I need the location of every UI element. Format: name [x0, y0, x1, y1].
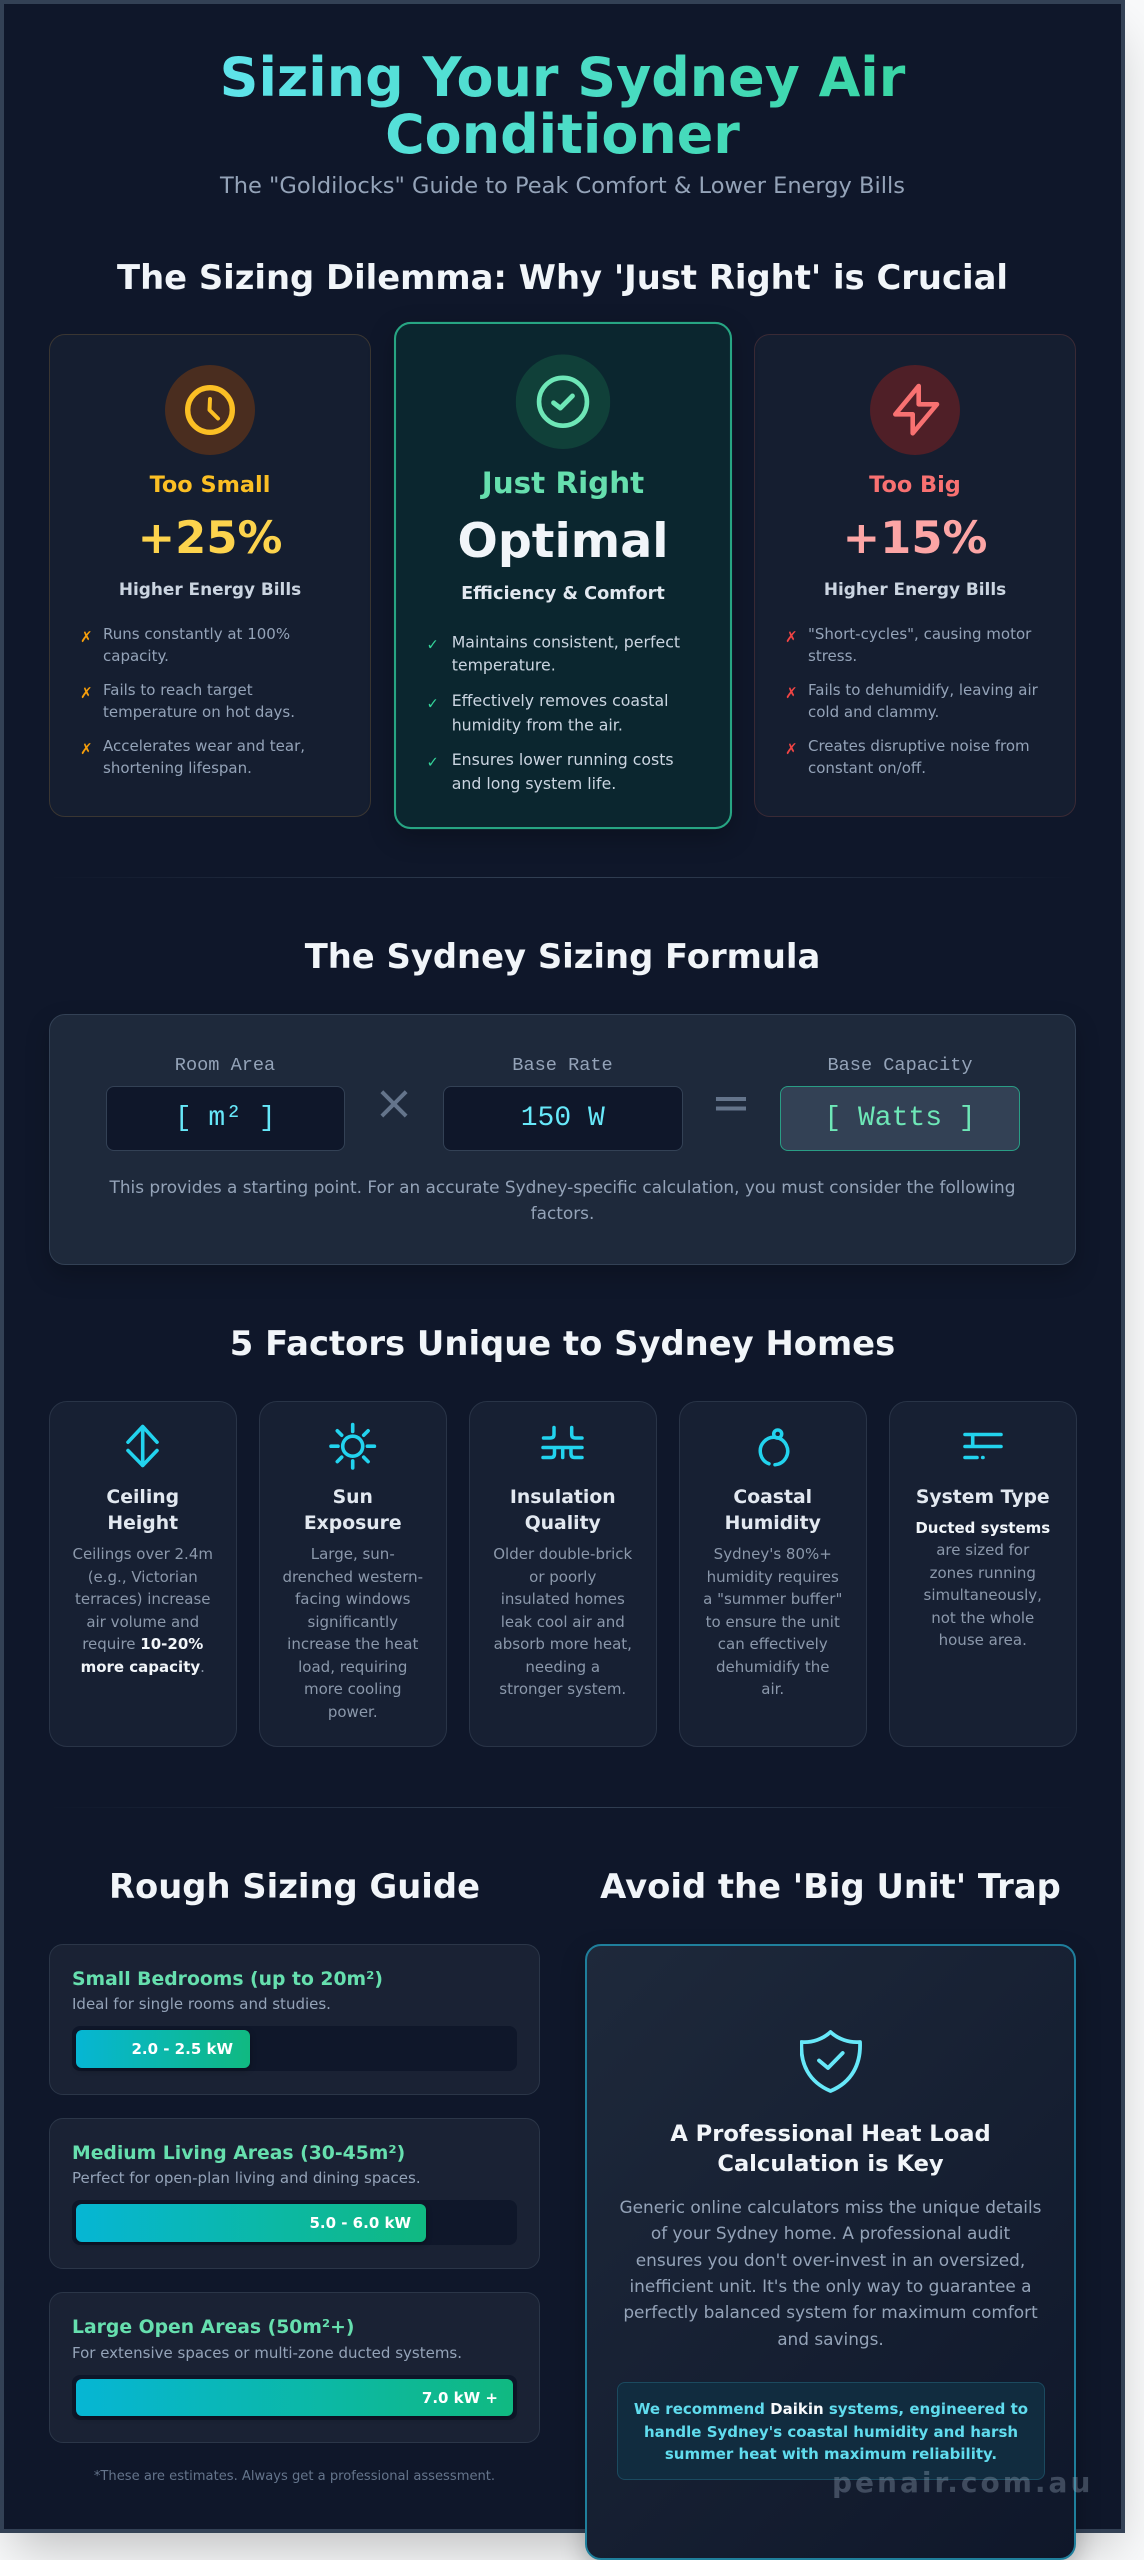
factor text: absorb more heat, — [494, 1635, 632, 1653]
factor text — [493, 1545, 632, 1698]
factor title: Quality — [525, 1513, 601, 1534]
list of drawbacks: ✗ — [80, 628, 93, 646]
list of benefits: and long system life. — [452, 774, 616, 793]
factor text: Older double-brick — [493, 1545, 632, 1563]
operator: equals: = — [711, 1075, 751, 1131]
list of benefits: humidity from the air. — [452, 715, 623, 734]
factor text: a "summer buffer" — [703, 1590, 842, 1608]
icon: system sliders — [963, 1432, 1003, 1460]
list of benefits: temperature. — [452, 656, 556, 675]
factor title — [106, 1486, 179, 1534]
factor text — [915, 1518, 1050, 1649]
list of drawbacks: capacity. — [103, 647, 169, 665]
card paragraph: ensures you don't over-invest in an oversized, — [636, 2250, 1025, 2270]
panel: insulation quality — [469, 1400, 656, 1747]
factor text: (e.g., Victorian — [88, 1568, 198, 1586]
callout: daikin recommendation: We recommend Daikin systems, engineered to — [634, 2400, 1028, 2418]
panel: coastal humidity — [679, 1400, 866, 1747]
label: room area: Room Area — [175, 1055, 275, 1076]
callout: daikin recommendation: summer heat with maximum reliability. — [665, 2445, 997, 2463]
factor text: house area. — [939, 1631, 1027, 1649]
factor text: more cooling — [304, 1680, 402, 1698]
list of drawbacks: ✗ — [80, 684, 93, 702]
list of benefits: ✓ — [426, 636, 439, 653]
input: m2: [ m² ] — [175, 1103, 276, 1134]
list of drawbacks: stress. — [808, 647, 857, 665]
heading: formula: The Sydney Sizing Formula — [305, 937, 820, 976]
card paragraph: Generic online calculators miss the unique details — [620, 2197, 1041, 2217]
factor title: System Type — [916, 1486, 1050, 1508]
icon: ceiling arrows — [126, 1424, 159, 1468]
panel: medium living areas — [49, 2118, 540, 2269]
item title: Large Open Areas (50m²+) — [72, 2317, 354, 2338]
input: 150 W: 150 W — [521, 1103, 605, 1134]
factor title: Coastal — [733, 1486, 812, 1508]
result: watts — [780, 1086, 1020, 1151]
label: base capacity: Base Capacity — [827, 1055, 973, 1076]
factor title — [304, 1486, 402, 1534]
factor text: or poorly — [529, 1568, 596, 1586]
factor text: Ceilings over 2.4m — [72, 1545, 213, 1563]
heading: sizing dilemma: The Sizing Dilemma: Why 'Just Right' is Crucial — [117, 258, 1008, 297]
list of benefits: Ensures lower running costs — [452, 751, 674, 769]
factor text: more capacity. — [81, 1658, 205, 1676]
divider — [49, 877, 1076, 878]
factor text: facing windows — [295, 1590, 410, 1608]
label: too big: Too Big — [869, 472, 961, 498]
panel: sun exposure — [259, 1400, 446, 1747]
subtitle: The "Goldilocks" Guide to Peak Comfort & Lower Energy Bills — [220, 172, 905, 198]
input: m2 — [106, 1086, 345, 1151]
list of drawbacks: shortening lifespan. — [103, 759, 252, 777]
list of drawbacks: ✗ — [785, 628, 798, 646]
bar: 5.0 - 6.0 kW — [72, 2200, 517, 2245]
card paragraph: and savings. — [777, 2329, 884, 2349]
list of drawbacks — [785, 624, 1038, 777]
list of drawbacks: "Short-cycles", causing motor — [808, 624, 1031, 642]
list of drawbacks: Accelerates wear and tear, — [103, 737, 305, 755]
list of drawbacks: Runs constantly at 100% — [103, 624, 290, 642]
factor text: not the whole — [931, 1608, 1034, 1626]
bar: 5.0 - 6.0 kW: 5.0 - 6.0 kW — [309, 2214, 411, 2232]
factor text: insulated homes — [501, 1590, 625, 1608]
heading: rough sizing guide: Rough Sizing Guide — [109, 1867, 480, 1906]
divider — [49, 1806, 1076, 1808]
list of drawbacks — [80, 624, 305, 777]
factor text: increase the heat — [287, 1635, 418, 1653]
factor text: significantly — [308, 1612, 398, 1630]
factor title — [725, 1486, 821, 1534]
stat caption: Higher Energy Bills — [119, 579, 301, 599]
factor text: simultaneously, — [924, 1586, 1042, 1604]
factor text: Large, sun- — [311, 1545, 395, 1563]
factor text: leak cool air and — [501, 1612, 625, 1630]
factor text: to ensure the unit — [706, 1612, 840, 1630]
label: just right: Just Right — [482, 466, 644, 501]
list of drawbacks: Fails to dehumidify, leaving air — [808, 681, 1038, 699]
title: Conditioner — [385, 102, 740, 166]
stat caption: Efficiency & Comfort — [461, 582, 665, 603]
factor title: Height — [107, 1513, 178, 1534]
card heading: A Professional Heat Load — [670, 2120, 991, 2146]
heading: big unit trap: Avoid the 'Big Unit' Trap — [600, 1867, 1061, 1906]
list of benefits: ✓ — [426, 754, 439, 771]
title — [0, 48, 1125, 162]
icon: shield check — [800, 2030, 862, 2093]
panel: too big — [754, 334, 1076, 817]
factor text — [703, 1545, 842, 1698]
list of drawbacks: cold and clammy. — [808, 703, 939, 721]
factor title: Exposure — [304, 1513, 402, 1534]
factor text: stronger system. — [499, 1680, 626, 1698]
list of drawbacks: Creates disruptive noise from — [808, 737, 1030, 755]
card paragraph — [620, 2197, 1041, 2349]
factor text — [72, 1545, 213, 1676]
panel: ceiling height — [49, 1400, 236, 1747]
stat caption: Higher Energy Bills — [824, 579, 1006, 599]
list of drawbacks: temperature on hot days. — [103, 703, 295, 721]
factor title: Insulation — [510, 1486, 616, 1508]
item subtitle: Perfect for open-plan living and dining spaces. — [72, 2169, 421, 2187]
list of benefits: Effectively removes coastal — [452, 692, 669, 710]
item subtitle: For extensive spaces or multi-zone ducted systems. — [72, 2344, 462, 2362]
callout: daikin recommendation: handle Sydney's coastal humidity and harsh — [644, 2422, 1018, 2440]
list of benefits — [426, 633, 680, 793]
panel: formula — [49, 1014, 1076, 1265]
panel: small bedrooms — [49, 1944, 540, 2095]
factor text: power. — [328, 1702, 378, 1720]
panel: large open areas — [49, 2292, 540, 2443]
item title: Small Bedrooms (up to 20m²) — [72, 1969, 383, 1990]
factor title: Ceiling — [106, 1486, 179, 1508]
bar: 2.0 - 2.5 kW — [72, 2026, 517, 2071]
label: too small: Too Small — [150, 472, 270, 498]
panel: just right — [394, 322, 732, 829]
factor title — [510, 1486, 616, 1534]
item subtitle: Ideal for single rooms and studies. — [72, 1995, 331, 2013]
list of benefits: Maintains consistent, perfect — [452, 633, 680, 651]
card paragraph: perfectly balanced system for maximum comfort — [623, 2302, 1038, 2322]
list of drawbacks: constant on/off. — [808, 759, 926, 777]
factor text: zones running — [930, 1564, 1036, 1582]
bar: 2.0 - 2.5 kW: 2.0 - 2.5 kW — [131, 2040, 233, 2058]
input: 150 W — [443, 1086, 682, 1151]
factor text — [282, 1545, 423, 1720]
callout: daikin recommendation — [617, 2382, 1045, 2480]
card paragraph: of your Sydney home. A professional audit — [651, 2223, 1010, 2243]
factor text: drenched western- — [282, 1568, 423, 1586]
bar: 7.0 kW +: 7.0 kW + — [422, 2388, 498, 2406]
factor text: humidity requires — [707, 1568, 839, 1586]
icon: clock — [165, 365, 255, 455]
stat: +25%: +25% — [138, 511, 282, 564]
factor text: air. — [761, 1680, 784, 1698]
panel: too small — [49, 334, 371, 817]
watermark: penair.com.au — [832, 2466, 1093, 2499]
formula note: This provides a starting point. For an accurate Sydney-specific calculation, you must consider the following — [110, 1177, 1015, 1197]
stat: +15%: +15% — [843, 511, 987, 564]
factor text: load, requiring — [298, 1658, 407, 1676]
factor text: terraces) increase — [75, 1590, 210, 1608]
icon: check circle — [516, 354, 610, 449]
list of drawbacks: Fails to reach target — [103, 681, 253, 699]
icon: bolt — [870, 365, 960, 455]
icon: humidity ring — [758, 1428, 790, 1466]
list of benefits: ✓ — [426, 695, 439, 712]
title: Sizing Your Sydney Air — [220, 46, 905, 108]
factor text: air volume and — [86, 1612, 199, 1630]
operator: multiply: × — [374, 1075, 414, 1131]
list of drawbacks: ✗ — [785, 740, 798, 758]
panel: heat load calculation — [585, 1944, 1076, 2560]
card paragraph: inefficient unit. It's the only way to guarantee a — [629, 2276, 1032, 2296]
result: watts: [ Watts ] — [824, 1103, 976, 1134]
factor title: Sun — [333, 1486, 373, 1508]
footnote: *These are estimates. Always get a professional assessment. — [94, 2469, 495, 2484]
factor text: are sized for — [936, 1541, 1029, 1559]
item title: Medium Living Areas (30-45m²) — [72, 2143, 405, 2164]
factor text: dehumidify the — [716, 1658, 830, 1676]
stat: optimal: Optimal — [458, 512, 668, 568]
factor text: require 10-20% — [82, 1635, 203, 1653]
card heading — [670, 2120, 991, 2177]
factor title: Humidity — [725, 1513, 821, 1534]
list of drawbacks: ✗ — [80, 740, 93, 758]
factor text: Ducted systems — [915, 1518, 1050, 1536]
list of drawbacks: ✗ — [785, 684, 798, 702]
icon: sun — [329, 1422, 376, 1470]
heading: 5 factors: 5 Factors Unique to Sydney Homes — [230, 1324, 895, 1363]
factor text: needing a — [525, 1658, 600, 1676]
factor text: Sydney's 80%+ — [714, 1545, 832, 1563]
factor text: can effectively — [718, 1635, 828, 1653]
bar: 7.0 kW + — [72, 2374, 517, 2420]
panel: system type — [889, 1400, 1076, 1747]
formula note: factors. — [531, 1203, 594, 1223]
icon: insulation — [541, 1426, 584, 1460]
card heading: Calculation is Key — [717, 2151, 944, 2177]
formula note — [109, 1177, 1015, 1223]
label: base rate: Base Rate — [512, 1055, 613, 1076]
